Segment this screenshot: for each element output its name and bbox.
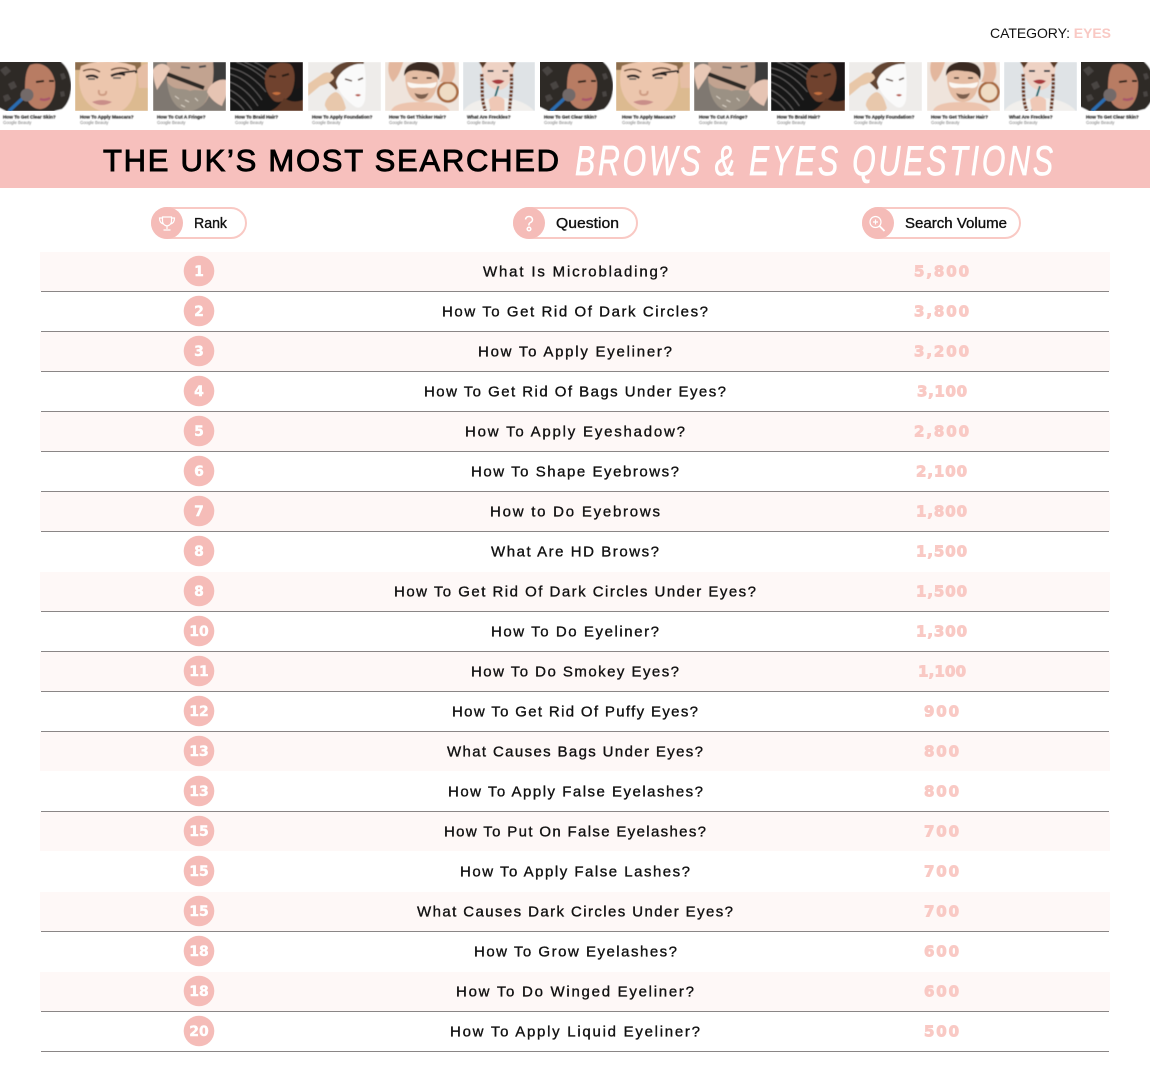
row 12: How To Get Rid Of Puffy Eyes? bbox=[452, 704, 698, 720]
row 7: 1,800 bbox=[916, 502, 967, 520]
tile: how to get clear skin repeat: Google Beauty bbox=[544, 120, 573, 125]
row 17: What Causes Dark Circles Under Eyes? bbox=[417, 904, 733, 920]
row 15: 15 bbox=[189, 824, 209, 840]
row 12 bbox=[184, 696, 959, 726]
column header: question bbox=[513, 207, 637, 239]
row 15: 700 bbox=[924, 822, 959, 840]
row 19 bbox=[184, 976, 959, 1006]
tile: how to apply mascara: How To Apply Mascara? bbox=[80, 114, 134, 120]
tile: how to get thicker hair: Google Beauty bbox=[389, 120, 418, 125]
tile: how to apply foundation repeat bbox=[849, 62, 922, 125]
tile: what are freckles repeat: Google Beauty bbox=[1009, 120, 1038, 125]
row 6 bbox=[184, 456, 967, 486]
row 16: 700 bbox=[924, 862, 959, 880]
column header: rank bbox=[151, 207, 246, 239]
tile: what are freckles: What Are Freckles? bbox=[467, 114, 511, 120]
row 13: What Causes Bags Under Eyes? bbox=[447, 744, 703, 760]
row 20: How To Apply Liquid Eyeliner? bbox=[450, 1024, 700, 1040]
tile: how to get clear skin final: How To Get Clear Skin? bbox=[1086, 114, 1139, 120]
row 3: 3,200 bbox=[914, 342, 969, 360]
row 8: 8 bbox=[194, 544, 204, 560]
tile: how to get clear skin: Google Beauty bbox=[3, 120, 32, 125]
tile: how to apply mascara bbox=[75, 62, 148, 125]
tile: how to apply mascara: Google Beauty bbox=[80, 120, 109, 125]
tile: how to braid hair bbox=[230, 62, 303, 125]
icon: magnifier bbox=[870, 216, 884, 231]
column header: search volume bbox=[862, 207, 1020, 239]
row 2 bbox=[184, 296, 969, 326]
row 10: 1,300 bbox=[916, 622, 967, 640]
row 12: 900 bbox=[924, 702, 959, 720]
row 15: How To Put On False Eyelashes? bbox=[444, 824, 706, 840]
tile: how to braid hair repeat: Google Beauty bbox=[777, 120, 806, 125]
tile: what are freckles repeat: What Are Freckles? bbox=[1009, 114, 1053, 120]
row 14: 800 bbox=[924, 782, 959, 800]
tile: how to cut a fringe repeat bbox=[694, 62, 768, 125]
row 4: How To Get Rid Of Bags Under Eyes? bbox=[424, 384, 726, 400]
tile: how to apply mascara repeat: Google Beauty bbox=[622, 120, 651, 125]
row 1: 1 bbox=[194, 264, 204, 280]
tile: how to get clear skin final: Google Beauty bbox=[1086, 120, 1115, 125]
row 4: 3,100 bbox=[917, 382, 967, 400]
tile: how to apply foundation bbox=[308, 62, 381, 125]
tile: how to cut a fringe: How To Cut A Fringe? bbox=[157, 114, 206, 120]
row 13 bbox=[184, 736, 959, 766]
row 5: 5 bbox=[194, 424, 204, 440]
tile: how to get thicker hair: How To Get Thicker Hair? bbox=[389, 114, 446, 120]
tile: how to braid hair: Google Beauty bbox=[235, 120, 264, 125]
row 2: 2 bbox=[194, 304, 204, 320]
row 1: What Is Microblading? bbox=[483, 264, 668, 280]
tile: how to apply mascara repeat: How To Apply Mascara? bbox=[622, 114, 676, 120]
row 18: 18 bbox=[189, 944, 209, 960]
row 7 bbox=[184, 496, 967, 526]
tile: how to get clear skin repeat bbox=[538, 60, 613, 125]
row 11: 11 bbox=[189, 664, 209, 680]
row 16: 15 bbox=[189, 864, 209, 880]
tile: how to get clear skin final bbox=[1079, 60, 1150, 125]
row 16 bbox=[184, 856, 959, 886]
row 8: What Are HD Brows? bbox=[491, 544, 659, 560]
tile: what are freckles bbox=[463, 62, 535, 125]
row 12: 12 bbox=[189, 704, 209, 720]
title: black heading: THE UK’S MOST SEARCHED bbox=[103, 143, 559, 178]
tile: how to apply foundation: Google Beauty bbox=[312, 120, 341, 125]
row 9: How To Get Rid Of Dark Circles Under Eyes? bbox=[394, 584, 756, 600]
tile: how to get thicker hair bbox=[385, 62, 459, 125]
photo strip bbox=[0, 60, 1150, 125]
tile: how to braid hair repeat bbox=[771, 62, 845, 125]
row 4: 4 bbox=[194, 384, 204, 400]
row 14 bbox=[184, 776, 959, 806]
tile: how to get thicker hair repeat bbox=[927, 62, 1000, 125]
tile: how to apply foundation: How To Apply Foundation? bbox=[312, 114, 373, 120]
row 16: How To Apply False Lashes? bbox=[460, 864, 690, 880]
row 11: 1,100 bbox=[918, 662, 966, 680]
row 20: 500 bbox=[924, 1022, 959, 1040]
row 17: 700 bbox=[924, 902, 959, 920]
row 1: 5,800 bbox=[914, 262, 969, 280]
tile: how to apply foundation repeat: How To Apply Foundation? bbox=[854, 114, 915, 120]
column header: question: Question bbox=[556, 215, 619, 232]
tile: how to braid hair repeat: How To Braid Hair? bbox=[777, 114, 820, 120]
icon: question mark bbox=[526, 216, 532, 231]
row 7: How to Do Eyebrows bbox=[490, 504, 660, 520]
column header: search volume: Search Volume bbox=[905, 215, 1007, 232]
column header: rank: Rank bbox=[194, 215, 227, 232]
tile: how to get clear skin repeat: How To Get Clear Skin? bbox=[544, 114, 597, 120]
icon: trophy bbox=[160, 217, 174, 230]
row 2: 3,800 bbox=[914, 302, 969, 320]
row 20: 20 bbox=[189, 1024, 209, 1040]
row 3: How To Apply Eyeliner? bbox=[478, 344, 672, 360]
row 6: How To Shape Eyebrows? bbox=[471, 464, 679, 480]
row 11: How To Do Smokey Eyes? bbox=[471, 664, 679, 680]
row 10 bbox=[184, 616, 967, 646]
tile: how to cut a fringe repeat: How To Cut A Fringe? bbox=[699, 114, 748, 120]
row 5: 2,800 bbox=[914, 422, 969, 440]
row 8: 1,500 bbox=[916, 542, 967, 560]
row 6: 2,100 bbox=[916, 462, 967, 480]
row 7: 7 bbox=[194, 504, 204, 520]
row 14: How To Apply False Eyelashes? bbox=[448, 784, 703, 800]
row 13: 800 bbox=[924, 742, 959, 760]
row 19: 18 bbox=[189, 984, 209, 1000]
tile: how to cut a fringe bbox=[153, 62, 226, 125]
tile: what are freckles: Google Beauty bbox=[467, 120, 496, 125]
tile: how to get clear skin: How To Get Clear Skin? bbox=[3, 114, 56, 120]
tile: how to get clear skin bbox=[0, 60, 71, 125]
row 3 bbox=[184, 336, 969, 366]
row 18 bbox=[184, 936, 959, 966]
tile: how to get thicker hair repeat: How To Get Thicker Hair? bbox=[931, 114, 988, 120]
row 1 bbox=[184, 256, 969, 286]
row 10: 10 bbox=[189, 624, 209, 640]
row 8 bbox=[184, 536, 967, 566]
tile: how to apply foundation repeat: Google Beauty bbox=[854, 120, 883, 125]
title: script heading: BROWS & EYES QUESTIONS bbox=[575, 137, 1053, 184]
row 14: 13 bbox=[189, 784, 209, 800]
row 3: 3 bbox=[194, 344, 204, 360]
row 19: How To Do Winged Eyeliner? bbox=[456, 984, 694, 1000]
tile: how to apply mascara repeat bbox=[616, 62, 690, 125]
tile: what are freckles repeat bbox=[1004, 62, 1077, 125]
row 20 bbox=[184, 1016, 959, 1046]
row 2: How To Get Rid Of Dark Circles? bbox=[442, 304, 708, 320]
row 18: 600 bbox=[924, 942, 959, 960]
tile: how to braid hair: How To Braid Hair? bbox=[235, 114, 278, 120]
row 9: 1,500 bbox=[916, 582, 967, 600]
row 15 bbox=[184, 816, 959, 846]
row 4 bbox=[184, 376, 967, 406]
row 19: 600 bbox=[924, 982, 959, 1000]
row 5 bbox=[184, 416, 969, 446]
tile: how to cut a fringe repeat: Google Beauty bbox=[699, 120, 728, 125]
row 13: 13 bbox=[189, 744, 209, 760]
row 10: How To Do Eyeliner? bbox=[491, 624, 659, 640]
row 18: How To Grow Eyelashes? bbox=[474, 944, 677, 960]
row stripes and dividers bbox=[40, 252, 1110, 1052]
row 17 bbox=[184, 896, 959, 926]
row 11 bbox=[184, 656, 966, 686]
row 9 bbox=[184, 576, 967, 606]
row 6: 6 bbox=[194, 464, 204, 480]
tile: how to get thicker hair repeat: Google Beauty bbox=[931, 120, 960, 125]
row 5: How To Apply Eyeshadow? bbox=[465, 424, 685, 440]
category label: CATEGORY: EYES bbox=[990, 25, 1111, 41]
tile: how to cut a fringe: Google Beauty bbox=[157, 120, 186, 125]
row 17: 15 bbox=[189, 904, 209, 920]
row 9: 8 bbox=[194, 584, 204, 600]
title banner bbox=[0, 130, 1150, 188]
